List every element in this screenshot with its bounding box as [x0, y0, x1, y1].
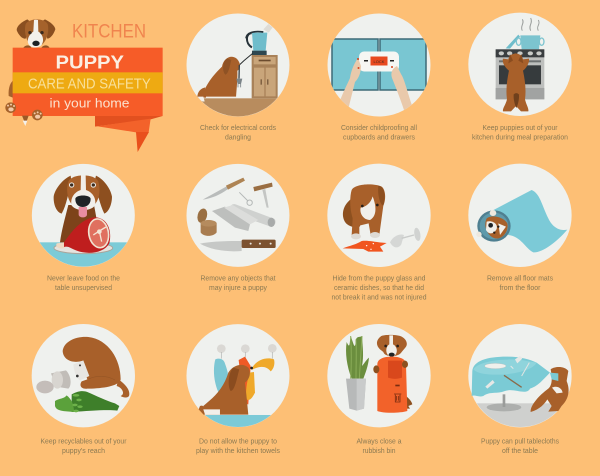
panel: food on table — [30, 164, 137, 292]
caption second line: dangling — [225, 133, 251, 142]
illustration: puppy pulling towels — [186, 324, 290, 432]
panel: recyclables — [32, 324, 135, 455]
caption second line: ceramic dishes, so that he did — [334, 283, 424, 292]
caption: Remove all floor mats — [487, 273, 553, 282]
illustration: puppy, plant and bin — [327, 324, 431, 427]
caption second line: rubbish bin — [362, 446, 396, 455]
caption second line: may injure a puppy — [209, 283, 267, 292]
panel: rubbish bin — [327, 324, 431, 455]
illustration: puppy rolled in mat — [468, 164, 572, 267]
illustration: cupboards with lock: LOCK — [374, 59, 385, 64]
panel: floor mats — [468, 164, 572, 292]
panel: meal preparation — [468, 13, 572, 142]
puppy peeking over banner — [9, 19, 55, 99]
caption third line: not break it and was not injured — [332, 293, 426, 302]
banner tagline: in your home — [50, 96, 130, 110]
caption: Never leave food on the — [47, 273, 120, 282]
caption: Remove any objects that — [200, 273, 276, 282]
panel: glass and ceramic — [327, 164, 431, 302]
kitchen heading: KITCHEN — [72, 22, 146, 42]
caption second line: from the floor — [500, 283, 541, 292]
caption: Puppy can pull tablecloths — [481, 436, 559, 445]
illustration: puppy and broken glass — [327, 164, 431, 267]
caption second line: kitchen during meal preparation — [472, 133, 568, 142]
illustration: knives, can, foil — [186, 164, 289, 267]
illustration: puppy with bottle and can — [32, 324, 135, 427]
caption: Always close a — [356, 436, 402, 445]
panel: tablecloths — [467, 324, 573, 455]
banner subtitle: CARE AND SAFETY — [28, 76, 151, 92]
panel: childproofing — [328, 14, 430, 142]
orange banner — [5, 48, 163, 152]
header banner — [5, 19, 163, 152]
caption second line: table unsupervised — [55, 283, 112, 292]
caption: Check for electrical cords — [200, 123, 276, 132]
illustration: puppy and kettle cord — [183, 13, 293, 118]
caption: Keep puppies out of your — [482, 123, 558, 132]
caption: Keep recyclables out of your — [40, 436, 127, 445]
caption second line: cupboards and drawers — [343, 133, 415, 142]
illustration: puppy at stove — [468, 13, 572, 116]
banner title: PUPPY — [56, 52, 124, 72]
panel: kitchen towels — [186, 324, 290, 455]
panel: electrical cords — [183, 13, 293, 142]
caption: Consider childproofing all — [341, 123, 417, 132]
caption second line: play with the kitchen towels — [196, 446, 280, 455]
panel: sharp objects — [186, 164, 289, 292]
illustration: dog with ham — [30, 164, 137, 269]
illustration: puppy pulling tablecloth — [467, 324, 573, 430]
caption second line: off the table — [502, 446, 538, 455]
caption second line: puppy's reach — [62, 446, 105, 455]
caption: Hide from the puppy glass and — [332, 273, 426, 282]
caption: Do not allow the puppy to — [199, 436, 277, 445]
